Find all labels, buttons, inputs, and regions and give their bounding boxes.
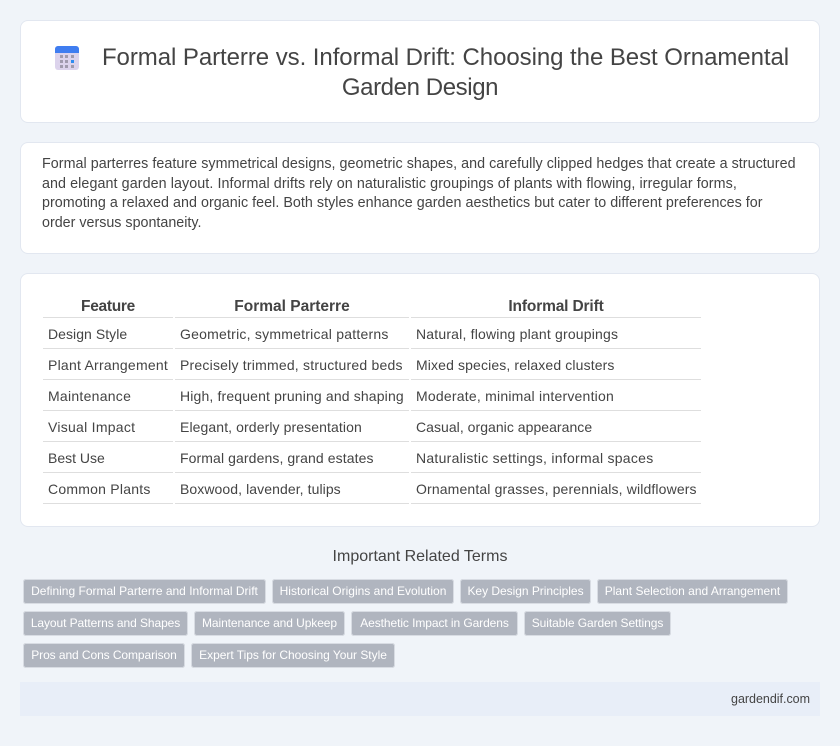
comparison table: High, frequent pruning and shaping (180, 388, 404, 404)
related term tags: Pros and Cons Comparison (31, 648, 177, 662)
comparison table: Naturalistic settings, informal spaces (416, 450, 653, 466)
footer site name: gardendif.com (731, 692, 810, 706)
intro text (42, 156, 796, 230)
related term tags: Plant Selection and Arrangement (605, 584, 780, 598)
comparison table: Ornamental grasses, perennials, wildflowers (416, 481, 697, 497)
comparison table: Design Style (48, 326, 127, 342)
title: Formal Parterre vs. Informal Drift: Choosing the Best Ornamental (102, 44, 789, 71)
comparison table: Elegant, orderly presentation (180, 419, 362, 435)
related term tags: Key Design Principles (467, 584, 584, 598)
comparison table: Natural, flowing plant groupings (416, 326, 618, 342)
title (102, 44, 789, 101)
icon: calendar (55, 46, 79, 70)
comparison table: Feature (81, 298, 135, 315)
related term tags: Expert Tips for Choosing Your Style (199, 648, 387, 662)
intro text: order versus spontaneity. (42, 214, 201, 230)
comparison table: Best Use (48, 450, 105, 466)
title: Garden Design (342, 74, 498, 101)
related term tags: Aesthetic Impact in Gardens (360, 616, 509, 630)
comparison table: Informal Drift (508, 298, 604, 315)
related term tags: Defining Formal Parterre and Informal Drift (31, 584, 258, 598)
comparison table: Plant Arrangement (48, 357, 168, 373)
comparison table: Maintenance (48, 388, 131, 404)
comparison table: Casual, organic appearance (416, 419, 592, 435)
comparison table: Visual Impact (48, 419, 135, 435)
panel: comparison table (20, 273, 820, 527)
heading: important related terms: Important Related Terms (333, 548, 507, 565)
panel: intro description (20, 142, 820, 254)
panel: title card (20, 20, 820, 123)
related term tags: Historical Origins and Evolution (280, 584, 446, 598)
related term tags: Suitable Garden Settings (532, 616, 663, 630)
comparison table: Precisely trimmed, structured beds (180, 357, 403, 373)
comparison table: Common Plants (48, 481, 151, 497)
comparison table: Formal Parterre (234, 298, 350, 315)
comparison table: Geometric, symmetrical patterns (180, 326, 389, 342)
comparison table: Mixed species, relaxed clusters (416, 357, 615, 373)
related term tags: Layout Patterns and Shapes (31, 616, 180, 630)
intro text: promoting a relaxed and organic feel. Both styles enhance garden aesthetics but cater to different preferences for (42, 195, 763, 211)
comparison table: Boxwood, lavender, tulips (180, 481, 341, 497)
footer bar (20, 682, 820, 716)
comparison table: Moderate, minimal intervention (416, 388, 614, 404)
intro text: and elegant garden layout. Informal drifts rely on naturalistic groupings of plants with flowing, irregular forms, (42, 176, 737, 192)
related term tags: Maintenance and Upkeep (202, 616, 337, 630)
comparison table: Formal gardens, grand estates (180, 450, 374, 466)
intro text: Formal parterres feature symmetrical designs, geometric shapes, and carefully clipped hedges that create a structured (42, 156, 796, 172)
